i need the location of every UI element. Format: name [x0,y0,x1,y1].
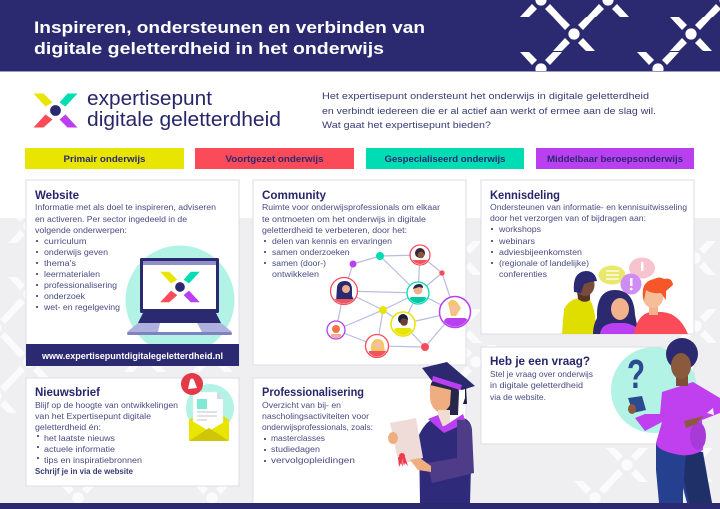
question mark: ? [627,351,645,397]
person: yellow man [391,312,415,336]
nieuwsbrief text: Blijf op de hoogte van ontwikkelingen [35,400,178,410]
community text: samen onderzoeken [272,247,350,257]
panel: nieuwsbrief [26,373,239,486]
logo wordmark: digitale geletterdheid [87,109,281,131]
community heading: Community [262,188,326,202]
panel: kennisdeling [481,180,694,334]
vraag heading: Heb je een vraag? [490,354,590,368]
kennisdeling text: Ondersteunen van informatie- en kennisuitwisseling [490,202,687,212]
kennisdeling heading: Kennisdeling [490,188,560,202]
website text: volgende onderwerpen: [35,225,127,235]
title: Inspireren, ondersteunen en verbinden van [34,18,425,37]
website text: onderwijs geven [44,247,108,257]
professionalisering text [262,400,373,465]
community text: Ruimte voor onderwijsprofessionals om elkaar [262,202,440,212]
website text: en activeren. Per sector ingedeeld in de [35,214,187,224]
kennisdeling text: webinars [498,236,535,246]
kennisdeling text: adviesbijeenkomsten [499,247,582,257]
website text: wet- en regelgeving [43,302,120,312]
website url bar [26,344,239,366]
panel: community [253,180,470,365]
kennisdeling text: door het verzorgen van of bijdragen aan: [490,213,646,223]
nieuwsbrief text: Schrijf je in via de website [35,466,133,476]
website url bar: www.expertisepuntdigitalegeletterdheid.nl [41,351,223,362]
nieuwsbrief text: van het Expertisepunt digitale [35,411,151,421]
icon: laptop [126,246,234,354]
community text: te ontmoeten om het onderwijs in digitale [262,214,426,224]
person: blond man [440,296,470,328]
nieuwsbrief text: geletterdheid én: [35,422,101,432]
title [34,18,425,58]
sector buttons: Gespecialiseerd onderwijs [384,154,506,164]
professionalisering text: onderwijsprofessionals, zoals: [262,422,373,432]
logo [34,88,281,131]
kennisdeling text [490,202,687,279]
community text: geletterdheid te verbeteren, door het: [262,225,407,235]
website text: thema's [44,258,76,268]
professionalisering text: vervolgopleidingen [271,455,355,465]
logo wordmark [87,88,281,131]
title: digitale geletterdheid in het onderwijs [34,39,384,58]
logo wordmark: expertisepunt [87,88,212,110]
professionalisering text: studiedagen [271,444,320,454]
community text: delen van kennis en ervaringen [272,236,392,246]
professionalisering heading: Professionalisering [262,385,364,399]
icon: newsletter envelope [181,373,234,441]
nieuwsbrief text [35,400,178,476]
community text: samen (door-) [272,258,326,268]
intro text: Wat gaat het expertisepunt bieden? [322,120,491,131]
sector buttons: Primair onderwijs [64,154,146,164]
website text: curriculum [44,236,86,246]
intro text [322,91,656,131]
kennisdeling text: conferenties [499,269,547,279]
intro text: Het expertisepunt ondersteunt het onderwijs in digitale geletterdheid [322,91,649,102]
bottom band [0,503,720,509]
sector buttons: Voortgezet onderwijs [226,154,324,164]
page background with pattern [0,218,720,503]
professionalisering text: Overzicht van bij- en [262,400,341,410]
professionalisering text: nascholingsactiviteiten voor [262,411,369,421]
sector buttons: Middelbaar beroepsonderwijs [547,154,683,164]
network diagram [327,245,470,358]
community text [262,202,440,279]
person: top woman [410,245,430,266]
person: hijab woman [330,278,358,305]
sector buttons [25,148,694,169]
community text: ontwikkelen [272,269,319,279]
vraag text: in digitale geletterdheid [490,380,583,390]
person: small woman [327,321,345,339]
professionalisering text: masterclasses [271,433,325,443]
header pattern [520,0,720,71]
person: blonde woman [366,334,388,358]
header band [0,0,720,72]
website text: Informatie met als doel te inspireren, adviseren [35,202,216,212]
vraag text: via de website. [490,392,546,402]
speech bubbles [598,258,655,294]
illustration: woman with question [611,338,720,503]
panel: professionalisering [253,362,475,505]
illustration: three people talking [562,258,688,334]
kennisdeling text: workshops [498,224,541,234]
kennisdeling text: (regionale of landelijke) [499,258,589,268]
person: teal man [407,282,429,305]
intro text: en verbindt iedereen die er al actief aan werkt of ermee aan de slag wil. [322,106,656,117]
website text: professionalisering [44,280,117,290]
website text: leermaterialen [44,269,100,279]
nieuwsbrief text: actuele informatie [44,444,115,454]
website heading: Website [35,188,79,202]
nieuwsbrief text: het laatste nieuws [44,433,115,443]
vraag text [490,369,593,402]
nieuwsbrief text: tips en inspiratiebronnen [44,455,142,465]
website text [35,202,216,312]
panel: website [26,180,239,366]
illustration: graduate [388,362,475,503]
panel: heb je een vraag [481,338,720,503]
vraag text: Stel je vraag over onderwijs [490,369,593,379]
website text: onderzoek [44,291,86,301]
nieuwsbrief heading: Nieuwsbrief [35,385,101,399]
